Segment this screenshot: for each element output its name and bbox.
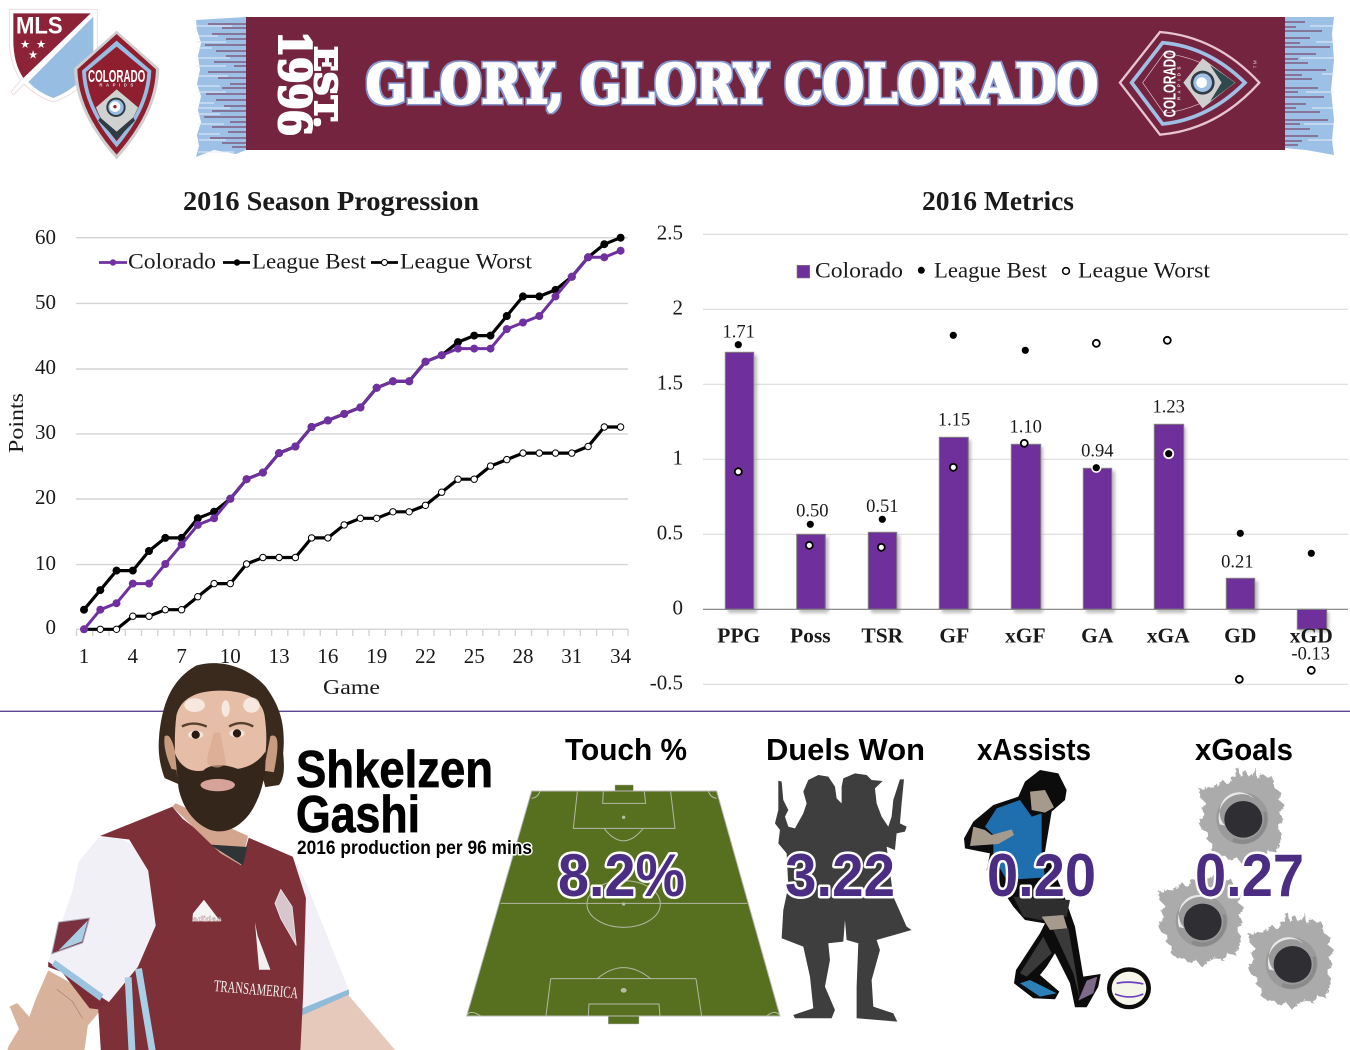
stat: xAssists [964, 732, 1151, 1009]
league worst markers [735, 337, 1315, 683]
scarf crest: TM [1253, 60, 1258, 68]
bar category labels: GD [1224, 624, 1256, 648]
scarf title: GLORY, GLORY COLORADO [366, 52, 1098, 116]
series: league worst [84, 427, 621, 629]
scarf EST. 1996 [268, 31, 342, 136]
crest on jersey [275, 889, 296, 946]
line chart x axis labels: 28 [512, 644, 534, 668]
line chart y axis labels: 10 [35, 551, 56, 575]
bar chart y axis labels: -0.5 [650, 670, 683, 694]
line chart y axis labels: 30 [35, 420, 56, 444]
ears [164, 735, 277, 772]
line chart x axis labels: 31 [561, 644, 582, 668]
stat value: 3.22: 3.22 [785, 842, 895, 909]
scarf left fringe [196, 17, 246, 157]
forehead sheen [184, 698, 260, 717]
bar chart legend [797, 257, 1210, 282]
MLS logo [9, 9, 97, 102]
bar chart y axis labels: 2.5 [657, 220, 683, 244]
stat value: 0.20: 0.20 [987, 842, 1096, 909]
stat heading: Duels Won: Duels Won [766, 732, 925, 767]
stat heading: xGoals: xGoals [1195, 732, 1293, 767]
jersey stripes [128, 969, 154, 1050]
bar chart legend: Colorado [815, 257, 903, 282]
line chart x axis labels: 25 [464, 644, 485, 668]
bar chart y axis labels: 0 [672, 596, 683, 620]
sponsor tower [255, 922, 270, 970]
MLS logo: ★ [20, 37, 30, 51]
line chart axis titles [4, 393, 380, 699]
line chart y axis labels: 50 [35, 290, 56, 314]
bar chart title: 2016 Metrics [922, 186, 1074, 216]
bar category labels: TSR [861, 624, 904, 648]
line chart legend: Colorado [128, 248, 216, 273]
bars [725, 352, 1327, 629]
line chart x axis labels: 22 [415, 644, 436, 668]
bar chart y axis labels: 2 [672, 296, 683, 320]
bar category labels: xGA [1147, 624, 1190, 648]
football pitch [467, 785, 780, 1024]
line chart y axis labels: 40 [35, 355, 56, 379]
bar category labels: PPG [717, 624, 760, 648]
line chart x axis labels: 19 [366, 644, 387, 668]
production subtitle: 2016 production per 96 mins [297, 838, 532, 859]
nose [207, 733, 226, 768]
line chart legend [99, 248, 532, 273]
bar value labels: 1.71 [723, 323, 755, 343]
left sleeve [48, 837, 156, 1002]
Colorado Rapids crest: COLORADO [88, 66, 145, 86]
line chart x axis labels: 4 [128, 644, 139, 668]
line chart legend: League Worst [400, 248, 532, 273]
bar value labels: 0.94 [1081, 442, 1113, 462]
bar shadows [728, 355, 1329, 632]
bar category labels [717, 624, 1333, 648]
adidas mark: adidas [192, 914, 222, 923]
bar value labels: 0.50 [796, 502, 828, 522]
icon: footballer [964, 770, 1151, 1009]
Colorado Rapids crest [74, 31, 159, 159]
scarf right fringe [1284, 17, 1334, 155]
line chart y axis labels: 20 [35, 485, 56, 509]
line chart legend: League Best [252, 248, 366, 273]
line chart x axis labels: 34 [610, 644, 632, 668]
metrics bar chart [650, 186, 1348, 694]
bar chart legend: League Worst [1078, 257, 1210, 282]
MLS logo: MLS [16, 13, 63, 40]
icon: duelling silhouettes [775, 773, 912, 1022]
scarf crest: RAPIDS [1177, 67, 1182, 100]
bar category labels: xGF [1005, 624, 1046, 648]
line chart x axis labels [79, 644, 632, 668]
bar value labels: 0.21 [1221, 553, 1253, 573]
bar category labels: Poss [790, 624, 831, 648]
bar chart y axis labels: 1.5 [657, 370, 683, 394]
scarf EST. 1996: 1996 [268, 31, 319, 136]
left arm and hand [3, 970, 107, 1050]
line chart x axis labels: 1 [79, 644, 89, 668]
beard [175, 752, 266, 831]
bar chart legend: League Best [934, 257, 1047, 282]
bar category labels: GF [939, 624, 969, 648]
bar value labels: 1.15 [938, 411, 970, 431]
stat value: 0.27: 0.27 [1195, 842, 1304, 909]
season progression chart [4, 186, 632, 699]
face [175, 691, 266, 829]
line chart axis titles: Points [4, 393, 28, 453]
bar value labels: 1.10 [1010, 418, 1042, 438]
scarf banner [196, 17, 1334, 157]
line chart y axis labels: 0 [46, 615, 56, 639]
league best markers [735, 332, 1315, 557]
player name [296, 741, 493, 844]
bar category labels: GA [1081, 624, 1114, 648]
bar value labels: 0.51 [866, 497, 898, 517]
line chart x axis labels: 7 [176, 644, 187, 668]
stat: duels won [766, 732, 925, 1022]
line chart y axis labels [35, 225, 56, 639]
ball [1107, 967, 1151, 1009]
player name: Gashi [296, 786, 420, 844]
line chart title: 2016 Season Progression [183, 186, 479, 216]
scarf body [246, 17, 1285, 150]
series: Colorado [84, 251, 621, 629]
eyes [182, 723, 253, 739]
right forearm [300, 994, 407, 1050]
line chart axis titles: Game [323, 675, 380, 699]
MLS logo: ★ [28, 48, 38, 62]
line chart y axis labels: 60 [35, 225, 56, 249]
stat: touch percentage [467, 732, 780, 1024]
bar value labels: 1.23 [1153, 398, 1185, 418]
lips [200, 779, 235, 791]
scarf EST. 1996: EST. [307, 46, 342, 128]
player photo: Shkelzen Gashi [3, 663, 407, 1050]
line chart x axis labels: 13 [269, 644, 290, 668]
scarf crest [1120, 32, 1259, 135]
bar chart y axis labels: 1 [672, 446, 683, 470]
player name: Shkelzen [296, 741, 493, 799]
bar chart y axis labels [650, 220, 683, 694]
stat: xGoals [1158, 732, 1334, 1009]
bar value labels: -0.13 [1291, 644, 1330, 664]
section divider [0, 710, 1350, 712]
MLS logo: ★ [36, 37, 46, 51]
bar category labels: xGD [1290, 624, 1333, 648]
adidas mark [192, 900, 222, 923]
stat heading: Touch %: Touch % [565, 732, 687, 767]
right sleeve [295, 860, 349, 1009]
sponsor text: TRANSAMERICA [213, 976, 299, 1002]
bar value labels [723, 323, 1330, 664]
series: league best [84, 238, 621, 610]
bar chart y axis labels: 0.5 [657, 520, 683, 544]
hair [159, 663, 284, 787]
icon: bullet holes [1158, 766, 1334, 1009]
stat value: 8.2%: 8.2% [558, 842, 685, 909]
stat heading: xAssists: xAssists [977, 732, 1091, 767]
line chart x axis labels: 16 [317, 644, 338, 668]
line chart x axis labels: 10 [220, 644, 241, 668]
MLS sleeve patch [52, 918, 90, 954]
scarf crest: COLORADO [1159, 50, 1179, 117]
Colorado Rapids crest: RAPIDS [99, 83, 133, 88]
jersey body [98, 807, 306, 1050]
